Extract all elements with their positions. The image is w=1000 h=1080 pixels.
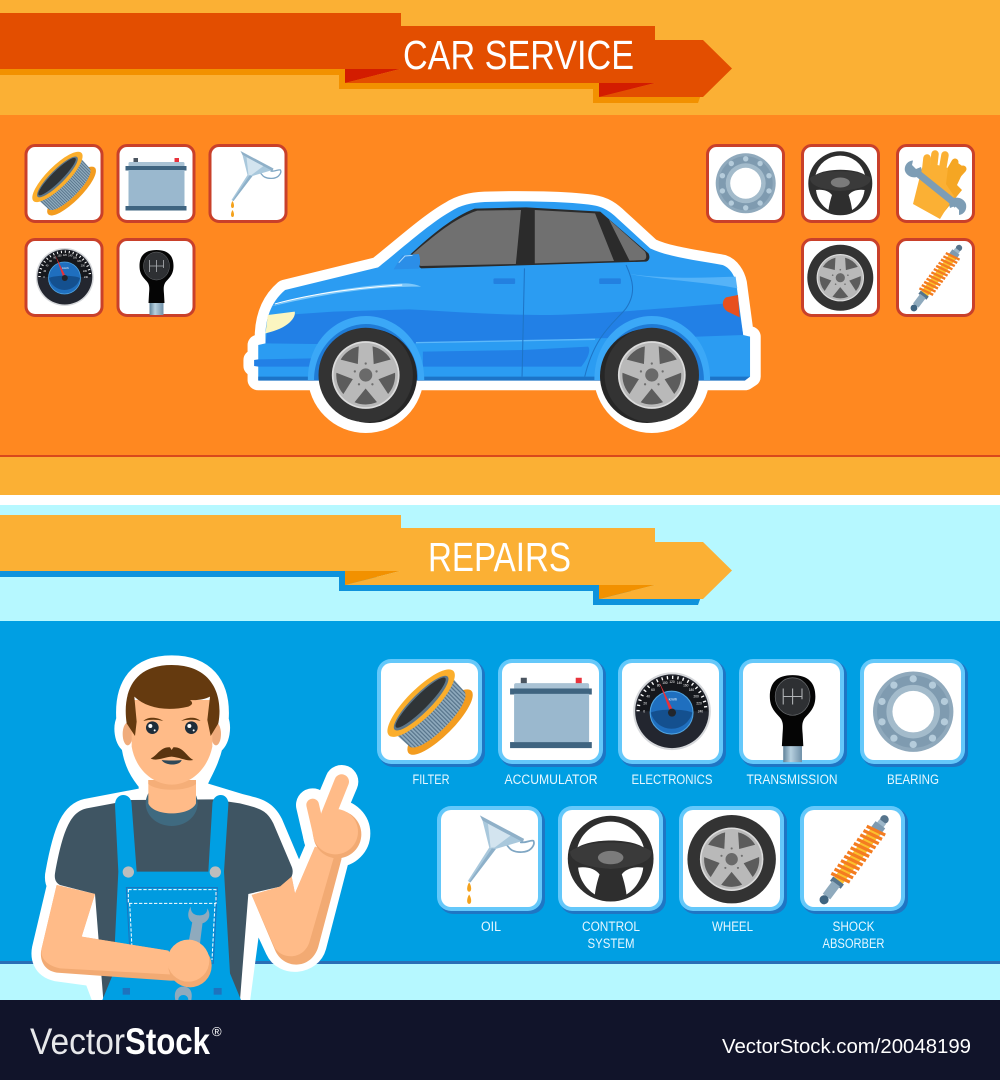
parts tile: oil <box>437 806 545 934</box>
parts tile: transmission <box>739 659 847 787</box>
footer image id: VectorStock.com/20048199 <box>722 1036 971 1058</box>
background: orange panel <box>0 115 1000 455</box>
label: filter: FILTER <box>412 772 450 787</box>
label: wheel: WHEEL <box>712 919 753 934</box>
icon tile: wheel <box>802 240 878 316</box>
icon tile: bearing <box>708 146 784 222</box>
parts tile: filter <box>377 659 485 787</box>
icon tile: shock absorber <box>898 240 974 316</box>
background: lower amber band <box>0 457 1000 495</box>
heading: car service: CAR SERVICE <box>403 32 634 78</box>
parts tile: shock absorber <box>800 806 908 951</box>
footer bar <box>0 1000 1000 1080</box>
label: control system <box>582 919 640 951</box>
mechanic illustration <box>41 665 361 1003</box>
label: shock absorber: ABSORBER <box>822 936 885 951</box>
parts tile: control system <box>558 806 666 951</box>
heading: repairs: REPAIRS <box>428 534 571 580</box>
label: shock absorber <box>822 919 885 951</box>
icon tile: speedometer <box>26 240 102 316</box>
ribbon: car service <box>0 13 732 103</box>
parts tile: accumulator <box>498 659 606 787</box>
background: cyan band <box>0 505 1000 621</box>
icon tile: gloves and wrench <box>898 146 974 222</box>
label: bearing: BEARING <box>887 772 939 787</box>
footer logo: Vector <box>30 1021 125 1062</box>
car illustration <box>254 201 750 433</box>
icon tile: gear knob <box>118 240 194 316</box>
label: accumulator: ACCUMULATOR <box>504 772 598 787</box>
label: control system: CONTROL <box>582 919 640 934</box>
label: shock absorber: SHOCK <box>832 919 874 934</box>
label: oil: OIL <box>481 919 501 934</box>
parts tile: electronics <box>618 659 726 787</box>
icon tile: battery <box>118 146 194 222</box>
label: electronics: ELECTRONICS <box>632 772 712 787</box>
footer logo: ® <box>212 1024 222 1039</box>
footer logo: Stock <box>125 1021 210 1062</box>
parts tile: wheel <box>679 806 787 934</box>
icon tile: filter <box>26 145 103 222</box>
footer logo <box>30 1021 222 1062</box>
background: lower cyan band <box>0 964 1000 1000</box>
label: control system: SYSTEM <box>588 936 634 951</box>
background: top band <box>0 0 1000 115</box>
icon tile: oil funnel <box>210 146 286 222</box>
ribbon: repairs <box>0 515 732 605</box>
parts tile: bearing <box>860 659 968 787</box>
label: transmission: TRANSMISSION <box>746 772 838 787</box>
icon tile: steering wheel <box>802 146 878 222</box>
background: blue panel <box>0 621 1000 961</box>
